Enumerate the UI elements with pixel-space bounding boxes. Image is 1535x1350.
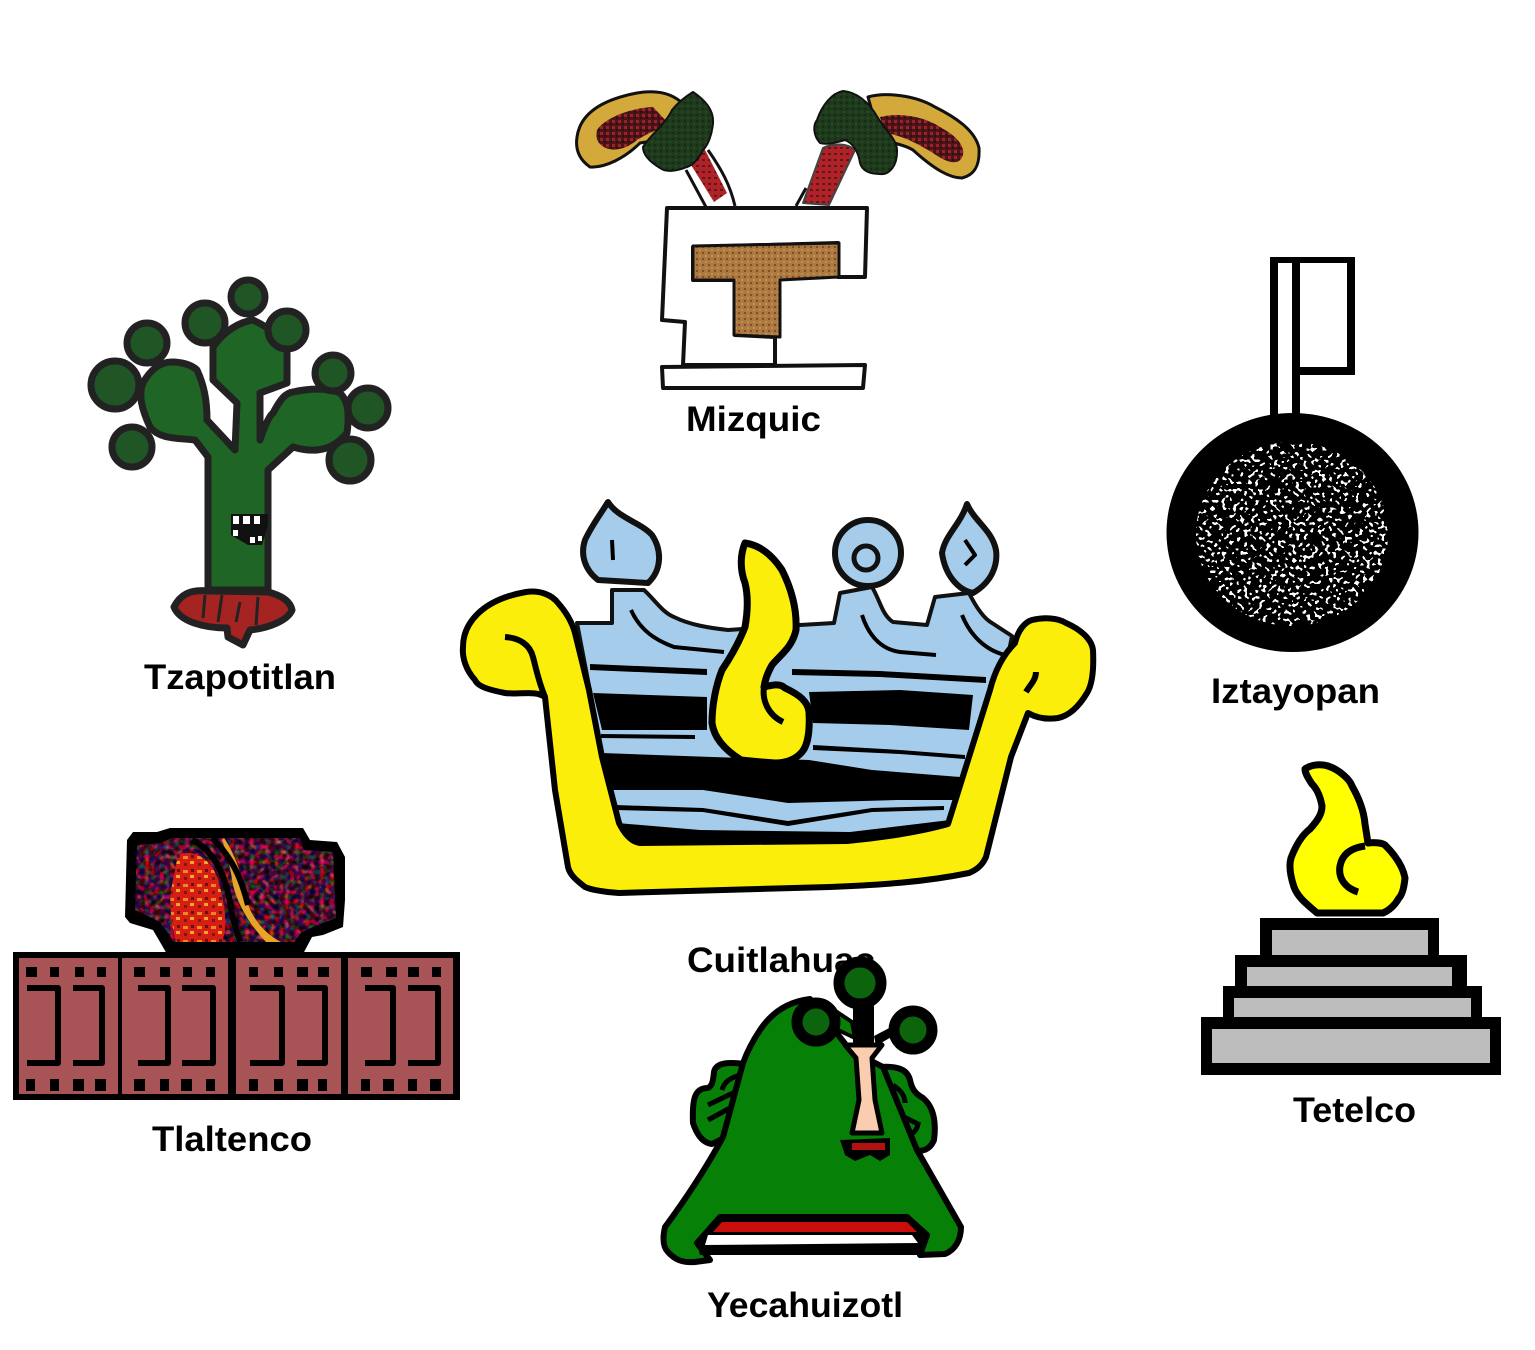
icon: left mesquite branch <box>577 92 735 207</box>
icon: central yellow flame <box>712 543 809 763</box>
label: Cuitlahuac: Cuitlahuac <box>687 941 875 980</box>
glyph: Tzapotitlan <box>91 280 388 645</box>
glyph: Yecahuizotl <box>664 961 961 1262</box>
icon: water body <box>577 587 1012 848</box>
label: Tetelco: Tetelco <box>1293 1091 1416 1130</box>
label: Mizquic: Mizquic <box>686 400 821 439</box>
label: Yecahuizotl: Yecahuizotl <box>707 1286 903 1325</box>
icon: cactus trunk and pads <box>141 320 348 590</box>
icon: figure line details <box>612 540 1005 655</box>
icon: black water bands <box>590 664 986 850</box>
glyph: Mizquic <box>577 91 979 388</box>
icon: canoe scroll details <box>505 637 1036 697</box>
icon: hill side curls <box>693 1063 935 1151</box>
glyph: Iztayopan <box>1166 257 1418 652</box>
icon: water droplets and shells <box>583 502 996 593</box>
icon: red brick row <box>13 952 460 1100</box>
icon: stepped pyramid <box>1201 918 1501 1075</box>
icon: tree on hill <box>845 1045 882 1133</box>
icon: stone temple base <box>662 208 867 365</box>
label: Tlaltenco: Tlaltenco <box>152 1120 312 1159</box>
icon: cactus fruits <box>91 280 388 481</box>
icon: image white backing over previous label <box>845 961 880 977</box>
glyph: Cuitlahuac <box>463 502 1093 893</box>
icon: speckled black disc <box>1166 413 1418 652</box>
icon: hill mouth <box>697 1218 924 1255</box>
icon: flag <box>1270 257 1355 420</box>
glyph: Tlaltenco <box>13 828 460 1100</box>
glyph: Tetelco <box>1201 765 1501 1075</box>
icon: green hill <box>664 999 961 1262</box>
label: Tzapotitlan: Tzapotitlan <box>144 658 336 697</box>
icon: tooth marks <box>231 514 268 545</box>
icon: yellow flame <box>1290 765 1405 913</box>
icon: yellow canoe rim <box>463 592 1093 893</box>
icon: earth stone <box>125 828 345 954</box>
icon: red root <box>174 591 292 645</box>
label: Iztayopan: Iztayopan <box>1211 672 1380 711</box>
icon: right mesquite branch <box>796 91 979 206</box>
